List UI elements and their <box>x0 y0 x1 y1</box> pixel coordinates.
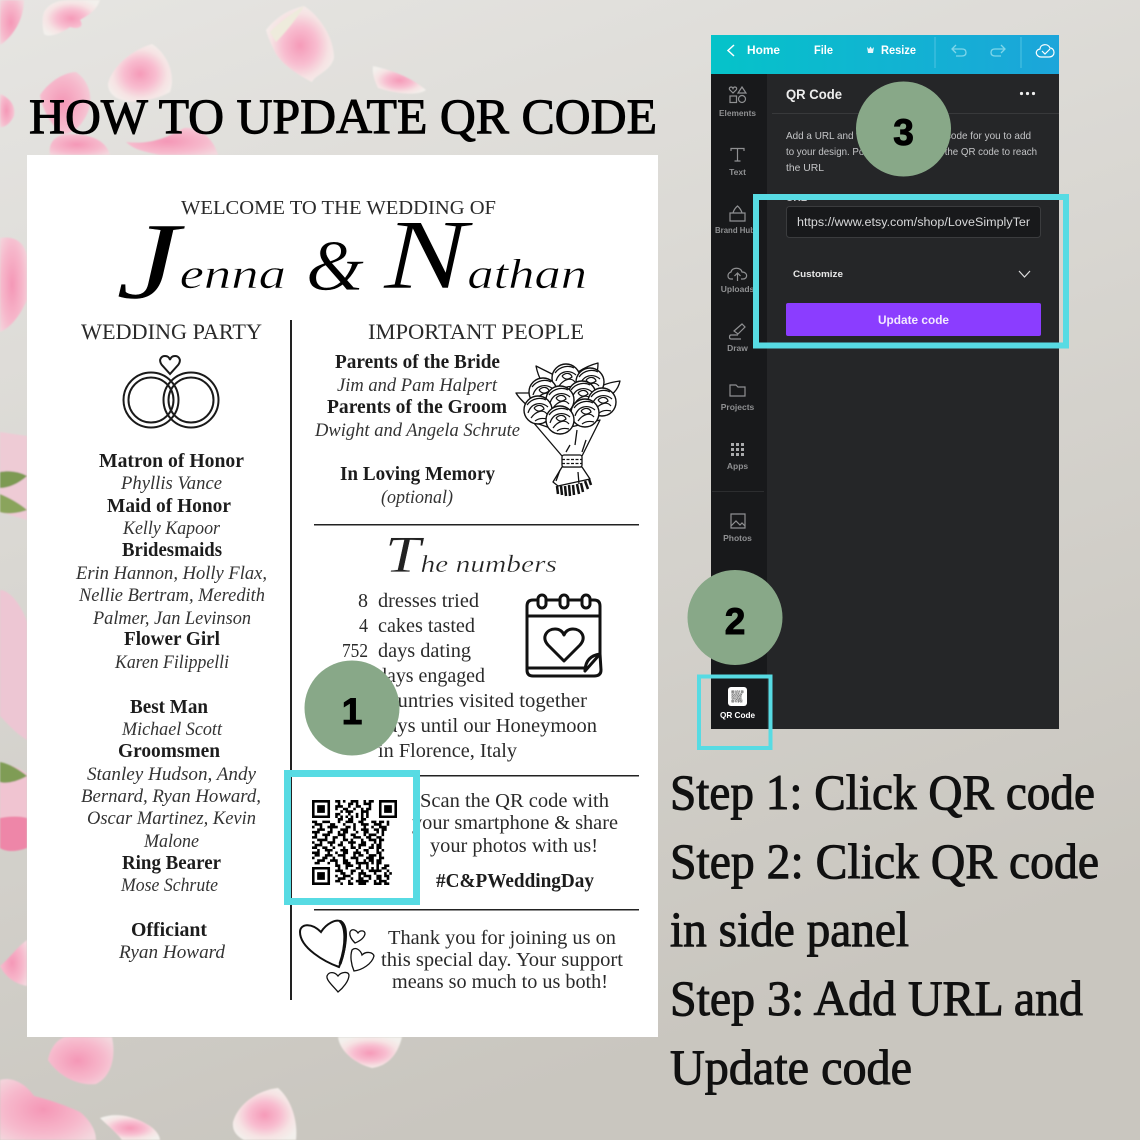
tool: draw: Draw <box>727 343 748 353</box>
top navigation bar: Resize <box>881 45 916 57</box>
text: parents and memory: Parents of the Bride <box>335 351 500 373</box>
tool: projects <box>721 385 755 412</box>
update code button <box>786 303 1041 336</box>
text: groom party: Ryan Howard <box>118 942 226 963</box>
text: bridal party <box>75 450 267 673</box>
highlight box: url fields <box>756 197 1066 346</box>
heading: welcome line: WELCOME TO THE WEDDING OF <box>181 197 496 219</box>
text: wedding numbers list: cakes tasted <box>378 615 475 637</box>
text: step instructions: Step 3: Add URL and <box>670 970 1083 1026</box>
text: bridal party: Erin Hannon, Holly Flax, <box>75 563 267 584</box>
text: step instructions: Step 2: Click QR code <box>670 833 1099 889</box>
icon: calendar with heart <box>527 595 601 676</box>
text: thank you message: means so much to us both! <box>392 971 608 993</box>
text: bridal party: Phyllis Vance <box>120 473 222 494</box>
panel: wedding program card <box>27 155 658 1037</box>
text: wedding numbers list <box>342 590 597 762</box>
step badge 1 <box>304 660 400 756</box>
text: wedding numbers list: 4 <box>359 615 368 637</box>
title: HOW TO UPDATE QR CODE <box>29 88 657 144</box>
tool: draw <box>727 324 748 353</box>
tool: text <box>729 148 746 177</box>
top navigation bar: File <box>814 45 833 57</box>
text: groom party: Malone <box>143 831 199 852</box>
qr code <box>312 801 396 884</box>
text: scan instructions <box>412 790 618 892</box>
text: groom party: Stanley Hudson, Andy <box>87 764 257 785</box>
column: important people <box>300 319 639 993</box>
step badge 2 <box>688 570 782 665</box>
customize row <box>793 269 1030 280</box>
panel: canva editor screenshot <box>711 35 1059 729</box>
side panel content: qr code app: URL <box>786 193 807 204</box>
heading: couple names: enna <box>180 252 286 298</box>
scattered pink petals <box>0 0 426 1140</box>
column divider <box>290 320 292 1000</box>
side panel content: qr code app <box>772 87 1059 336</box>
side panel content: qr code app: to your design. Point your camera at the QR code to reach <box>786 147 1037 158</box>
text: step instructions: Step 1: Click QR code <box>670 764 1095 820</box>
text: groom party: Michael Scott <box>121 719 223 740</box>
sidebar: tool icons <box>712 87 764 720</box>
text: wedding numbers list: 752 <box>342 640 368 662</box>
tool: text: Text <box>729 167 746 177</box>
column: wedding party <box>75 319 267 963</box>
heading: couple names: N athan <box>383 199 587 310</box>
customize row: Customize <box>793 269 843 280</box>
heading: important people: IMPORTANT PEOPLE <box>368 319 584 344</box>
step badge 1: 1 <box>342 691 362 732</box>
text: groom party: Best Man <box>130 696 208 718</box>
top navigation bar: Home <box>747 45 780 57</box>
icon: hearts <box>300 921 374 992</box>
text: scan instructions: Scan the QR code with <box>420 790 609 812</box>
text: wedding numbers list: 8 <box>358 590 368 612</box>
step badge 3 <box>856 82 951 176</box>
side panel content: qr code app: QR Code <box>786 87 842 102</box>
highlight box: qr code <box>288 774 416 902</box>
text: wedding numbers list: days engaged <box>377 665 485 687</box>
text: wedding numbers list: countries visited together <box>378 690 587 712</box>
heading: the numbers: T he numbers <box>385 527 557 584</box>
text: groom party: Ring Bearer <box>122 852 221 874</box>
highlight box: sidebar qr code <box>699 676 770 748</box>
heading: wedding party: WEDDING PARTY <box>81 319 262 344</box>
step badge 2: 2 <box>725 601 745 642</box>
tool: elements: Elements <box>719 108 756 118</box>
heading: couple names: J <box>116 200 186 322</box>
text: step instructions: in side panel <box>670 901 909 957</box>
tool: uploads <box>721 268 755 294</box>
tool: brand hub <box>715 206 755 235</box>
text: parents and memory: Dwight and Angela Schrute <box>314 420 520 441</box>
text: parents and memory <box>314 351 520 508</box>
step badge 3: 3 <box>893 112 914 153</box>
side panel content: qr code app: Add a URL and we'll generate a QR code for you to add <box>786 131 1031 142</box>
text: parents and memory: (optional) <box>381 487 453 508</box>
tool: brand hub: Brand Hub <box>715 225 755 235</box>
text: groom party: Bernard, Ryan Howard, <box>81 786 261 807</box>
text: groom party: Groomsmen <box>118 740 220 762</box>
heading: couple names <box>116 199 587 322</box>
side panel content: qr code app: the URL <box>786 163 824 174</box>
text: thank you message: Thank you for joining us on <box>388 927 616 949</box>
update code button: Update code <box>878 315 949 327</box>
url input field <box>786 206 1040 238</box>
text: wedding numbers list: in Florence, Italy <box>378 740 517 762</box>
text: scan instructions: your photos with us! <box>430 835 598 857</box>
text: groom party: Oscar Martinez, Kevin <box>87 808 256 829</box>
text: bridal party: Maid of Honor <box>107 495 231 517</box>
tool: photos <box>723 514 752 543</box>
text: scan instructions: #C&PWeddingDay <box>436 870 594 892</box>
heading: couple names: & <box>306 226 364 306</box>
text: thank you message <box>381 927 623 993</box>
text: wedding numbers list: days dating <box>378 640 471 662</box>
tool: elements <box>719 87 756 118</box>
icon: rose bouquet <box>516 363 620 496</box>
text: scan instructions: your smartphone & share <box>412 812 618 834</box>
tool: qr code: QR Code <box>720 710 755 720</box>
text: bridal party: Bridesmaids <box>122 539 222 561</box>
tool: qr code <box>720 687 755 720</box>
text: wedding numbers list: dresses tried <box>378 590 479 612</box>
text: bridal party: Kelly Kapoor <box>122 518 221 539</box>
top navigation bar <box>711 35 1059 74</box>
text: step instructions <box>670 764 1099 1095</box>
text: groom party <box>81 696 261 963</box>
text: thank you message: this special day. Your support <box>381 949 623 971</box>
tool: apps <box>727 443 748 471</box>
text: bridal party: Karen Filippelli <box>114 652 229 673</box>
text: parents and memory: Parents of the Groom <box>327 396 507 418</box>
tool: uploads: Uploads <box>721 284 755 294</box>
text: bridal party: Nellie Bertram, Meredith <box>78 585 265 606</box>
text: groom party: Officiant <box>131 919 207 941</box>
tool: apps: Apps <box>727 461 748 471</box>
text: parents and memory: In Loving Memory <box>340 463 495 485</box>
text: bridal party: Palmer, Jan Levinson <box>92 608 251 629</box>
text: parents and memory: Jim and Pam Halpert <box>337 375 498 396</box>
text: groom party: Mose Schrute <box>120 875 218 896</box>
icon: wedding rings with heart <box>124 356 218 428</box>
text: wedding numbers list: days until our Honeymoon <box>378 715 597 737</box>
tool: photos: Photos <box>723 533 752 543</box>
tool: projects: Projects <box>721 402 755 412</box>
text: bridal party: Flower Girl <box>124 628 220 650</box>
text: bridal party: Matron of Honor <box>99 450 244 472</box>
url input field: https://www.etsy.com/shop/LoveSimplyTer <box>797 217 1030 229</box>
text: step instructions: Update code <box>670 1039 912 1095</box>
